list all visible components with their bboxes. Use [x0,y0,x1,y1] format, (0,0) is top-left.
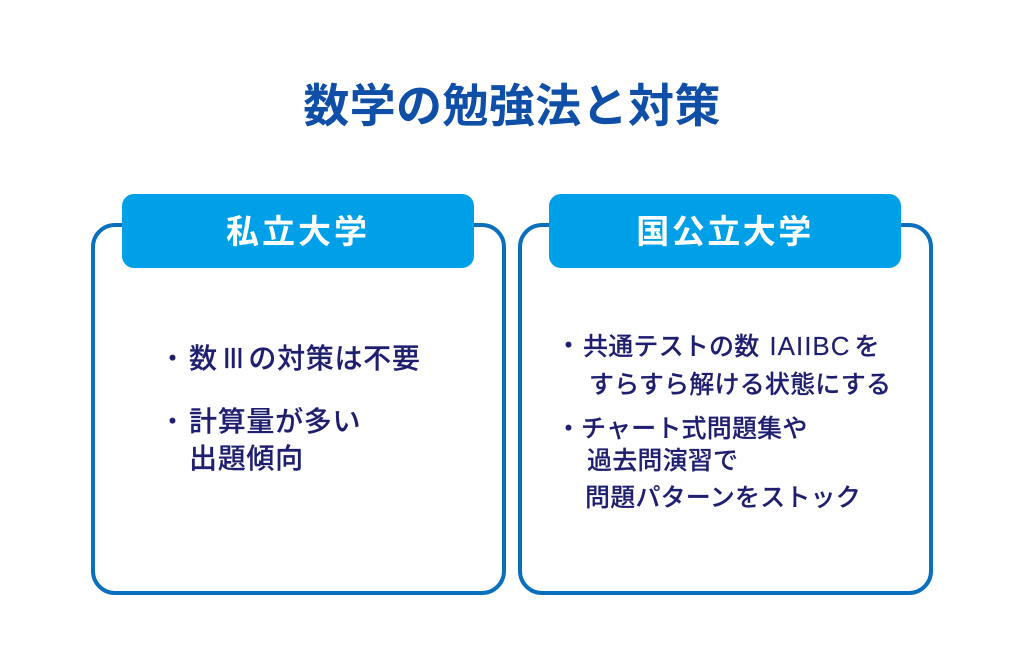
bullet: heavy calculation: 計算量が多い [189,406,361,437]
panel: private universities [91,194,506,595]
bullet: chart workbook practice: 過去問演習で [587,447,738,475]
bullet: heavy calculation: 出題傾向 [189,443,304,474]
bullet: chart workbook practice: チャート式問題集や [581,415,808,443]
panel: national and public universities [518,194,933,595]
bullet: common test: 共通テストの数 IAIIBCを [583,331,880,361]
panel frame [518,223,933,595]
bullet: common test: ・ [556,332,581,360]
bullet: chart workbook practice [556,415,861,512]
bullet: heavy calculation: ・ [160,408,185,436]
bullet: chart workbook practice: 問題パターンをストック [585,484,861,512]
bullet: no Math III prep: ・ [160,345,185,373]
heading tab: private universities [122,194,474,268]
panel frame [91,223,506,595]
bullet: heavy calculation [160,406,361,474]
bullet: common test: すらすら解ける状態にする [589,371,891,399]
bullet: common test [556,331,891,399]
bullet: no Math III prep: 数IIIの対策は不要 [189,343,421,375]
heading tab: national and public universities: 国公立大学 [636,213,814,250]
heading tab: private universities: 私立大学 [226,213,370,250]
heading tab: national and public universities [549,194,901,268]
title: 数学の勉強法と対策 [303,80,721,132]
bullet: chart workbook practice: ・ [556,415,581,443]
